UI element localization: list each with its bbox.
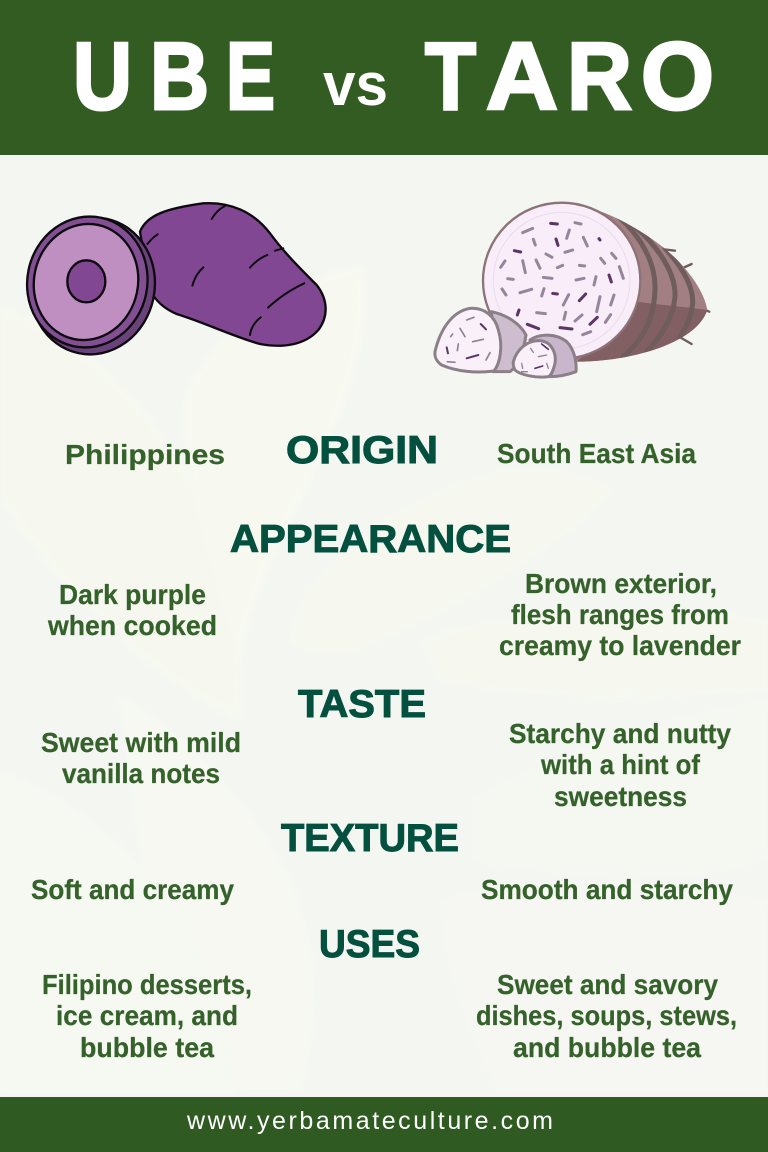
ube uses: ice cream, and bbox=[56, 1000, 238, 1031]
taro uses: Sweet and savory bbox=[497, 969, 718, 1000]
origin heading: ORIGIN bbox=[286, 429, 438, 472]
title bbox=[73, 23, 714, 130]
ube taste: vanilla notes bbox=[62, 758, 220, 789]
taste heading: TASTE bbox=[298, 683, 426, 726]
texture heading: TEXTURE bbox=[281, 817, 459, 860]
ube uses bbox=[42, 969, 252, 1063]
title: T bbox=[425, 23, 476, 130]
illustration: ube bbox=[15, 203, 326, 366]
taro body bbox=[560, 203, 707, 362]
taro uses: and bubble tea bbox=[513, 1032, 701, 1063]
taro root hairs bbox=[663, 249, 709, 344]
ube texture: Soft and creamy bbox=[31, 874, 234, 905]
ube taste bbox=[41, 727, 241, 789]
ube appearance: when cooked bbox=[47, 610, 217, 641]
taro uses bbox=[476, 969, 737, 1063]
title: U bbox=[73, 23, 132, 130]
ube uses: Filipino desserts, bbox=[42, 969, 252, 1000]
ube skin marks bbox=[147, 206, 304, 335]
taro appearance: Brown exterior, bbox=[525, 568, 717, 599]
ube cut half bbox=[15, 205, 168, 366]
taro small chunk one bbox=[435, 308, 526, 372]
taro taste: Starchy and nutty bbox=[509, 718, 731, 749]
ube appearance: Dark purple bbox=[59, 579, 206, 610]
taro bands bbox=[612, 212, 693, 357]
title: R bbox=[567, 23, 632, 130]
appearance heading: APPEARANCE bbox=[230, 518, 511, 561]
illustration: taro bbox=[435, 203, 709, 377]
ube origin: Philippines bbox=[65, 439, 225, 470]
header band bbox=[0, 0, 768, 155]
origin row bbox=[65, 429, 696, 472]
title: E bbox=[226, 23, 275, 130]
taro small chunk two bbox=[513, 335, 576, 377]
uses heading: USES bbox=[319, 923, 420, 966]
taro texture: Smooth and starchy bbox=[481, 874, 733, 905]
title: vs bbox=[323, 51, 388, 118]
taro appearance: creamy to lavender bbox=[499, 630, 741, 661]
taro appearance: flesh ranges from bbox=[511, 599, 729, 630]
taro taste bbox=[509, 718, 731, 812]
footer band bbox=[0, 1097, 768, 1152]
taro flesh specks bbox=[501, 223, 623, 335]
taro taste: sweetness bbox=[554, 781, 687, 812]
taro taste: with a hint of bbox=[540, 749, 701, 780]
taro appearance bbox=[499, 568, 741, 661]
ube uses: bubble tea bbox=[80, 1032, 214, 1063]
title: O bbox=[641, 23, 714, 130]
ube appearance bbox=[47, 579, 217, 641]
footer url: www.yerbamateculture.com bbox=[186, 1107, 553, 1135]
title: A bbox=[486, 23, 558, 130]
title: B bbox=[150, 23, 209, 130]
taro uses: dishes, soups, stews, bbox=[476, 1000, 737, 1031]
ube taste: Sweet with mild bbox=[41, 727, 241, 758]
ube whole body bbox=[140, 203, 326, 346]
taro cut face bbox=[483, 203, 640, 359]
taro origin: South East Asia bbox=[497, 438, 696, 469]
